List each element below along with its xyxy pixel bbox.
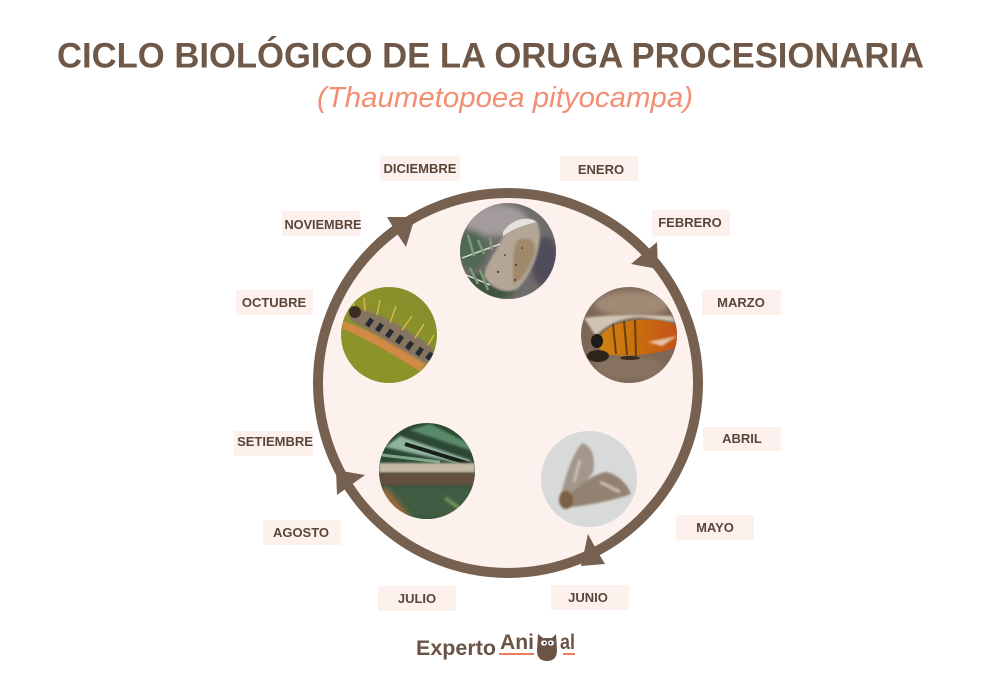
month: mayo [676,515,754,540]
month: diciembre: DICIEMBRE [384,161,457,176]
month: julio: JULIO [398,591,436,606]
cycle diagram: ring with arrows [318,193,698,573]
month: julio [378,586,456,611]
logo: Experto Animal [416,631,575,661]
month: noviembre [282,211,362,236]
month: junio [551,585,629,610]
month: febrero [652,210,730,236]
logo: Experto Animal: Experto [416,637,496,660]
month: setiembre [234,431,313,456]
month labels [234,156,781,611]
month: mayo: MAYO [696,520,734,535]
icon: cat [537,634,557,661]
arrow: top left [387,217,415,247]
month: diciembre [380,156,460,181]
photo: caterpillar on twig [341,287,437,383]
arrow: bottom right [581,534,605,566]
arrow: top right [631,242,658,269]
logo: Experto Animal: al [560,631,575,654]
month: marzo: MARZO [717,295,765,310]
month: noviembre: NOVIEMBRE [284,217,362,232]
photo: twig with pine needles [379,423,475,519]
month: agosto [263,520,341,545]
month: agosto: AGOSTO [273,525,329,540]
month: setiembre: SETIEMBRE [237,434,313,449]
month: octubre [236,290,313,315]
photo: pupa [581,287,680,383]
month: enero: ENERO [578,162,624,177]
month: febrero: FEBRERO [658,215,722,230]
month: abril: ABRIL [722,431,762,446]
month: marzo [702,290,781,315]
month: junio: JUNIO [568,590,608,605]
month: abril [703,427,781,451]
photo: nest on pine branch [460,203,556,299]
logo: Experto Animal: Ani [500,631,534,654]
subtitle: (Thaumetopoea pityocampa) [317,82,693,114]
month: octubre: OCTUBRE [242,295,306,310]
title: CICLO BIOLÓGICO DE LA ORUGA PROCESIONARIA [57,36,924,76]
photo: moth [541,431,637,527]
month: enero [560,156,638,181]
arrow: left [336,470,365,495]
